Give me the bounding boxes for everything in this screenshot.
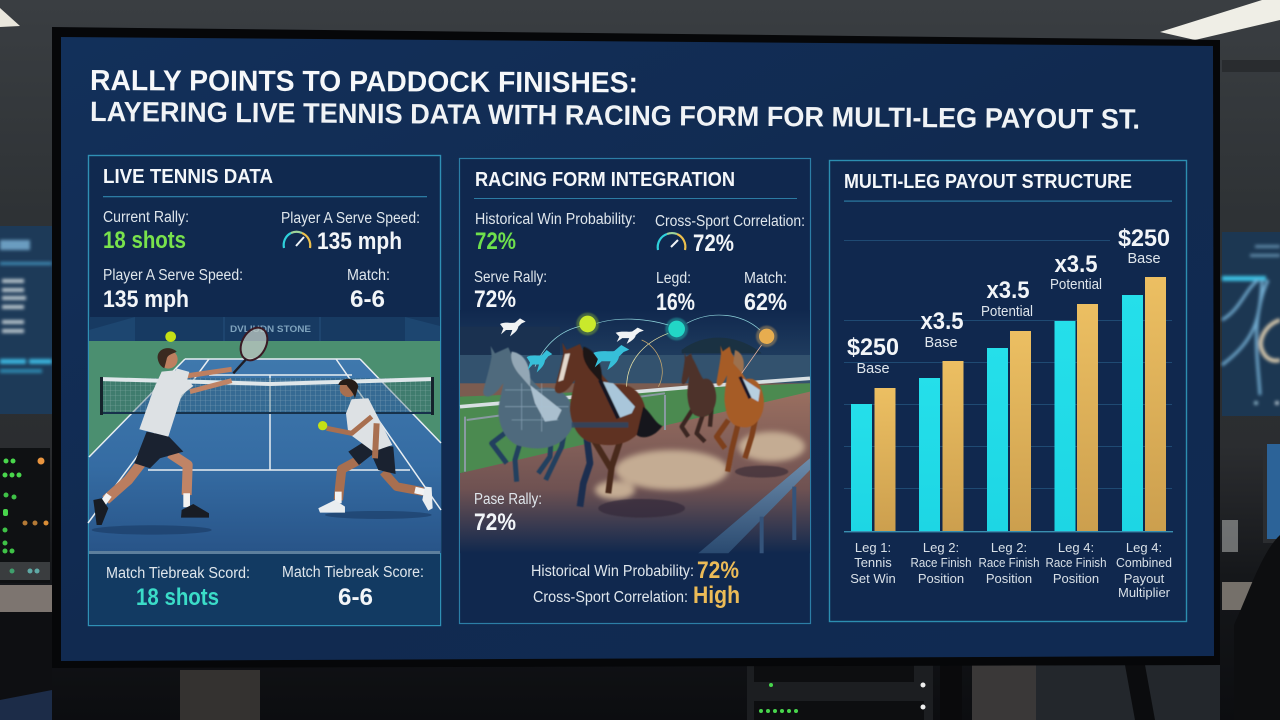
summary: correlation: High — [693, 582, 740, 609]
bars leg 3 — [987, 331, 1031, 532]
axis labels — [850, 540, 1172, 600]
tennis court scene: DVLIUDN STONE — [230, 324, 311, 334]
axis labels: Leg 4: — [1126, 540, 1162, 555]
fence right — [698, 458, 810, 553]
stat: legd — [656, 270, 695, 316]
bars leg 2 — [919, 361, 964, 532]
stat: tiebreak left: 18 shots — [136, 584, 219, 611]
stat: current rally: 18 shots — [103, 227, 186, 254]
panel: multi-leg payout structure — [830, 160, 1186, 622]
racing scene — [460, 310, 810, 553]
value labels: x3.5 — [986, 277, 1030, 304]
panel: racing form integration — [460, 158, 810, 624]
stat: match percentage — [744, 270, 787, 316]
axis labels: Race Finish — [1046, 555, 1106, 570]
axis labels: Set Win — [850, 571, 896, 586]
axis labels: Position — [986, 571, 1032, 586]
axis labels: Leg 1: — [855, 540, 891, 555]
bar chart — [844, 225, 1173, 600]
horse: wireframe grey — [483, 346, 574, 482]
axis labels: Payout — [1124, 571, 1165, 586]
axis labels: Combined — [1116, 555, 1172, 570]
stat: match percentage: Match: — [744, 270, 787, 287]
stat: tiebreak left: Match Tiebreak Scord: — [106, 565, 250, 582]
summary: win probability: 72% — [697, 557, 739, 584]
dust cloud — [595, 432, 805, 499]
stat: serve speed with gauge — [281, 210, 420, 255]
stat: pase rally — [474, 491, 542, 536]
summary: win probability: Historical Win Probability: — [531, 563, 694, 580]
axis labels: Race Finish — [910, 555, 972, 570]
tracking balls — [576, 313, 777, 347]
payout panel heading: MULTI-LEG PAYOUT STRUCTURE — [844, 171, 1132, 193]
stat: tiebreak right: 6-6 — [338, 584, 373, 611]
axis labels: Position — [918, 571, 964, 586]
background monitor left — [0, 226, 52, 414]
tennis net — [100, 377, 434, 415]
tennis footer strip — [89, 551, 440, 625]
stat: serve speed with gauge: Player A Serve Speed: — [281, 210, 420, 227]
stat: serve rally: 72% — [474, 286, 516, 313]
value labels: Potential — [1050, 277, 1102, 293]
stat: current rally: Current Rally: — [103, 209, 189, 226]
stat: serve speed: 135 mph — [103, 286, 189, 313]
horse: chestnut — [717, 345, 764, 472]
bars leg 1 — [851, 388, 896, 532]
value labels: $250 — [847, 334, 899, 361]
value labels: Potential — [981, 304, 1033, 320]
stat: serve speed: Player A Serve Speed: — [103, 267, 243, 284]
player B — [318, 379, 433, 519]
stat: historical win probability: 72% — [475, 228, 516, 255]
value labels: x3.5 — [1054, 251, 1098, 278]
axis labels: Leg 2: — [923, 540, 959, 555]
stat: serve speed with gauge: 135 mph — [317, 228, 402, 255]
value labels: Base — [924, 335, 958, 351]
axis labels: Race Finish — [978, 555, 1040, 570]
stat: serve speed — [103, 267, 243, 313]
rack under display — [180, 664, 1220, 720]
tennis panel heading: LIVE TENNIS DATA — [103, 166, 273, 188]
axis labels: Leg 2: — [991, 540, 1027, 555]
player A with racket — [92, 323, 273, 535]
background monitor right — [1222, 232, 1280, 416]
stat: current rally — [103, 209, 189, 254]
bars leg 4 — [1054, 304, 1098, 532]
stat: cross-sport correlation with gauge — [655, 213, 805, 257]
display screen — [61, 37, 1214, 661]
summary: correlation — [533, 582, 740, 609]
stat: tiebreak right — [282, 564, 424, 611]
stat: serve rally: Serve Rally: — [474, 269, 547, 286]
stat: legd: 16% — [656, 289, 695, 316]
stat: tiebreak right: Match Tiebreak Score: — [282, 564, 424, 581]
axis labels: Position — [1053, 571, 1099, 586]
data arcs — [535, 315, 762, 387]
stat: tiebreak left — [106, 565, 250, 611]
stat: pase rally: 72% — [474, 509, 516, 536]
horse silhouettes — [500, 318, 644, 372]
stat: historical win probability — [475, 211, 636, 255]
axis labels: Tennis — [854, 555, 892, 570]
stat: pase rally: Pase Rally: — [474, 491, 542, 508]
stat: serve rally — [474, 269, 547, 313]
stat: match — [347, 267, 390, 313]
title: RALLY POINTS TO PADDOCK FINISHES: — [90, 65, 638, 99]
axis labels: Multiplier — [1118, 585, 1171, 600]
racing panel heading: RACING FORM INTEGRATION — [475, 169, 735, 191]
tennis court scene — [88, 317, 441, 553]
bars leg 5 — [1122, 277, 1166, 532]
panel: live tennis data — [88, 156, 441, 626]
stat: cross-sport correlation with gauge: 72% — [693, 230, 734, 257]
value labels: $250 — [1118, 225, 1170, 252]
title — [90, 65, 1140, 135]
horse: lead bay — [555, 343, 662, 507]
axis labels: Leg 4: — [1058, 540, 1094, 555]
title: LAYERING LIVE TENNIS DATA WITH RACING FORM FOR MULTI-LEG PAYOUT ST. — [90, 96, 1140, 135]
value labels: x3.5 — [920, 308, 964, 335]
horse: distant bay — [682, 352, 716, 442]
stat: match percentage: 62% — [744, 289, 787, 316]
value labels: Base — [1127, 251, 1161, 267]
summary: win probability — [531, 557, 739, 584]
background small monitor right — [1222, 440, 1280, 720]
summary: correlation: Cross-Sport Correlation: — [533, 589, 688, 606]
stat: historical win probability: Historical Win Probability: — [475, 211, 636, 228]
stat: match: Match: — [347, 267, 390, 284]
server rack left — [0, 448, 50, 583]
stat: match: 6-6 — [350, 286, 385, 313]
value labels — [847, 225, 1170, 377]
value labels: Base — [856, 361, 890, 377]
stat: cross-sport correlation with gauge: Cross-Sport Correlation: — [655, 213, 805, 230]
stat: legd: Legd: — [656, 270, 691, 287]
